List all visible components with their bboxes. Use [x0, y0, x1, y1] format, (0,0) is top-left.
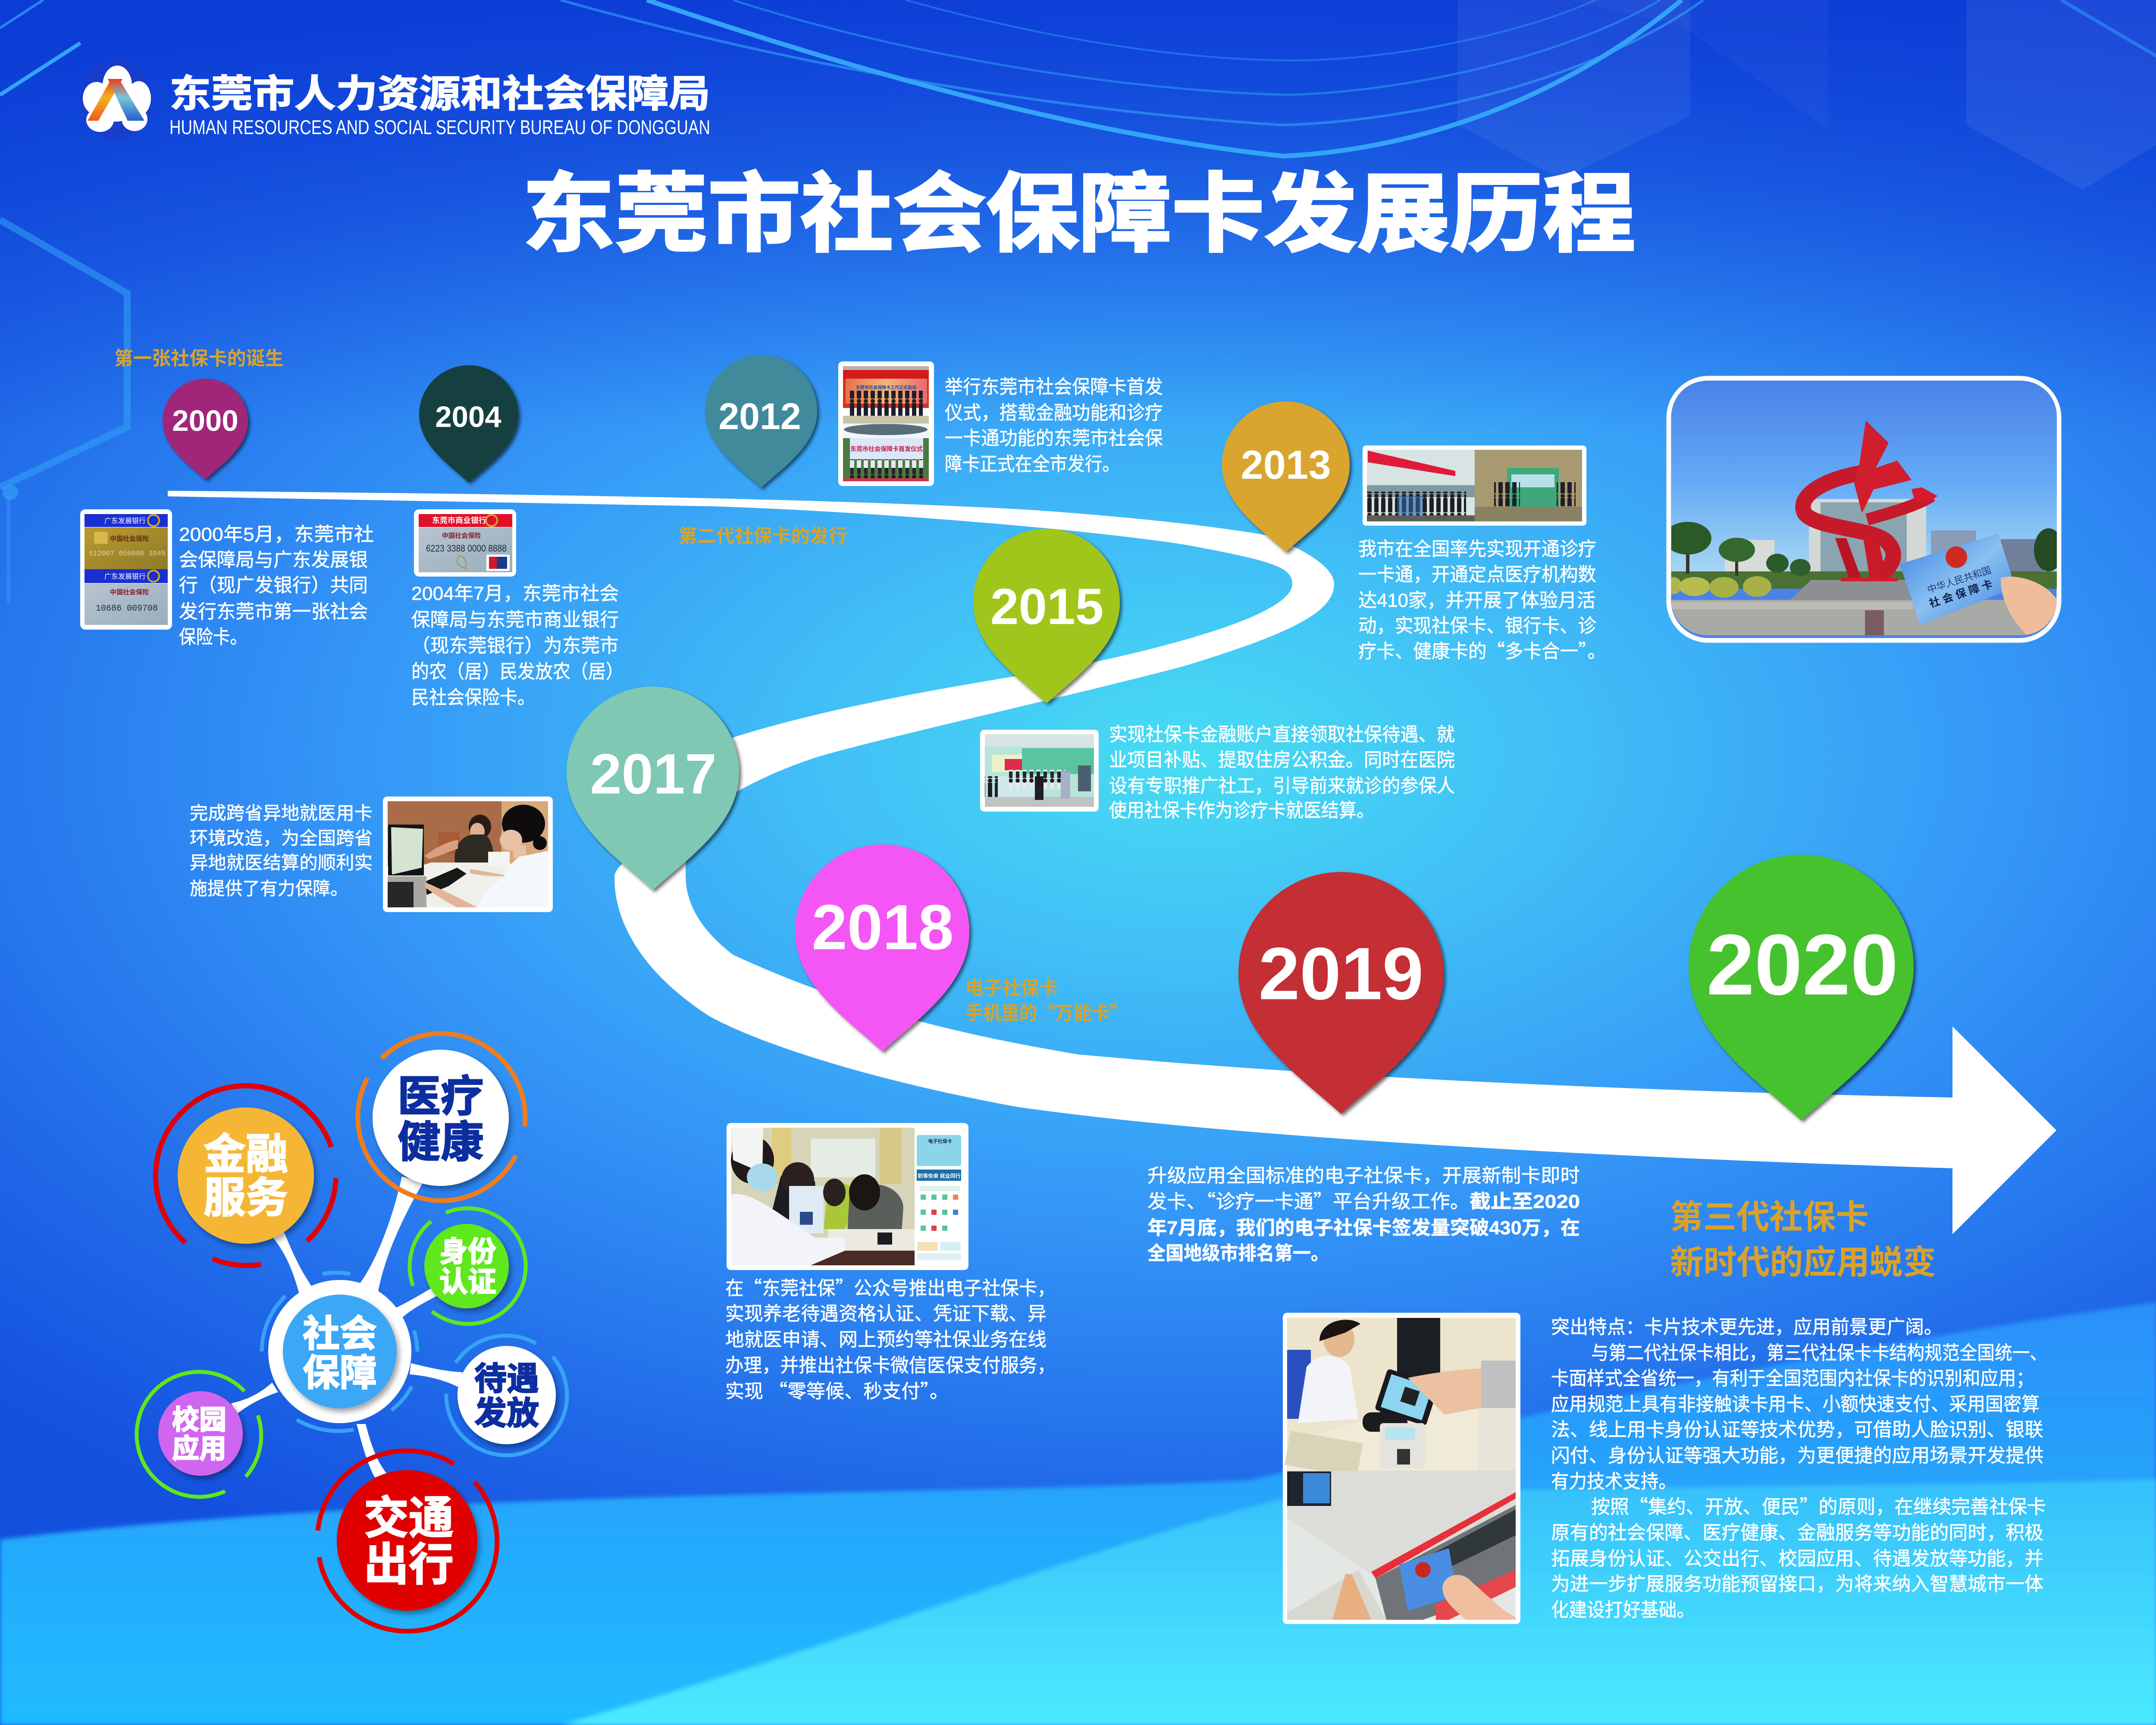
photo: 2012 launch ceremony: 东莞市社会保障卡首发仪式 — [850, 445, 923, 452]
text: third-generation description: 为进一步扩展服务功能预留接口，为将来纳入智慧城市一体 — [1551, 1574, 2043, 1595]
text: 2004 milestone: 保障局与东莞市商业银行 — [411, 609, 619, 630]
pin 2012 — [705, 355, 817, 488]
photo: 2012 launch ceremony: 东莞市社会保障卡工作正式启动 — [856, 385, 916, 390]
text: third-generation description: 闪付、身份认证等强大功能，为更便捷的应用场景开发提供 — [1551, 1445, 2043, 1466]
text: 2019 milestone: 截止至2020 — [1470, 1191, 1580, 1212]
text: 2015 milestone: 设有专职推广社工，引导前来就诊的参保人 — [1109, 775, 1455, 797]
text: 2000 milestone: 发行东莞市第一张社会 — [179, 601, 368, 622]
text: 2012 milestone: 举行东莞市社会保障卡首发 — [945, 376, 1163, 398]
text: 2013 milestone — [1358, 539, 1606, 663]
heading: second generation: 第二代社保卡的发行 — [678, 526, 847, 547]
pin 2017: 2017 — [590, 742, 717, 806]
node: financial services: 金融 — [204, 1130, 288, 1178]
pin 2019: 2019 — [1259, 932, 1423, 1015]
text: third-generation description: 与第二代社保卡相比，第三代社保卡卡结构规范全国统一、 — [1591, 1342, 2047, 1364]
node: transport: 出行 — [364, 1540, 454, 1590]
pin 2000: 2000 — [172, 404, 238, 437]
photo: landmark sculpture with card: 社 会 保 障 卡 — [1928, 578, 1994, 610]
text: 2017 milestone: 异地就医结算的顺利实 — [190, 853, 373, 873]
node: medical health — [358, 1034, 525, 1201]
text: 2019 milestone: 发卡、“诊疗一卡通”平台升级工作。 — [1147, 1186, 1470, 1214]
text: third-generation description: 化建设打好基础。 — [1551, 1600, 1695, 1621]
timeline ribbon arrow — [168, 491, 2056, 1234]
text: 2012 milestone: 仪式，搭载金融功能和诊疗 — [945, 402, 1163, 423]
pin 2015 — [973, 529, 1120, 703]
text: third-generation description: 应用规范上具有非接触读卡用卡、小额快速支付、采用国密算 — [1551, 1394, 2040, 1415]
node: benefits payment — [446, 1336, 567, 1455]
hub: social security — [262, 1273, 417, 1431]
node: medical health: 健康 — [398, 1118, 484, 1167]
text: 2012 milestone — [945, 376, 1163, 475]
logo: bureau emblem — [80, 60, 153, 140]
text: 2018 milestone — [725, 1273, 1056, 1403]
text: 2018 milestone: 实现养老待遇资格认证、凭证下载、异 — [725, 1303, 1047, 1324]
organisation name — [169, 72, 710, 138]
node: campus — [137, 1372, 261, 1497]
text: third-generation description: 卡面样式全省统一，有利于全国范围内社保卡的识别和应用； — [1551, 1368, 2034, 1389]
pin 2020 — [1689, 855, 1914, 1120]
text: third-generation description: 拓展身份认证、公交出行、校园应用、待遇发放等功能，并 — [1551, 1548, 2043, 1569]
text: 2017 milestone: 完成跨省异地就医用卡 — [190, 803, 373, 823]
hub: social security: 社会 — [303, 1313, 377, 1355]
node: medical health: 医疗 — [398, 1073, 484, 1121]
photo: 2012 launch ceremony — [838, 361, 934, 486]
node: financial services: 服务 — [204, 1174, 288, 1221]
heading: third generation: 第三代社保卡 — [1670, 1199, 1869, 1236]
text: 2000 milestone: 会保障局与广东发展银 — [179, 549, 368, 571]
photo: first-generation cards: 512007 056006 3945 — [89, 550, 166, 558]
title: 东莞市社会保障卡发展历程 — [522, 166, 1636, 263]
photo: first-generation cards: 中国社会保险 — [110, 535, 149, 543]
node: transport: 交通 — [364, 1493, 454, 1543]
photo: landmark sculpture with card — [1664, 378, 2063, 640]
photo: 2004 card: 中国社会保险 — [442, 532, 481, 539]
pin 2012: 2012 — [718, 396, 801, 437]
text: 2018 milestone: 办理，并推出社保卡微信医保支付服务， — [725, 1355, 1056, 1376]
text: 2012 milestone: 一卡通功能的东莞市社会保 — [945, 428, 1163, 449]
text: 2013 milestone: 达410家，并开展了体验月活 — [1358, 590, 1595, 611]
text: 2017 milestone: 环境改造，为全国跨省 — [190, 828, 373, 848]
photo: 2017 clinic desk — [383, 797, 553, 912]
organisation name: HUMAN RESOURCES AND SOCIAL SECURITY BUREAU OF DONGGUAN — [169, 116, 710, 138]
pin 2019 — [1238, 872, 1444, 1114]
text: 2017 milestone: 施提供了有力保障。 — [190, 878, 348, 899]
text: third-generation description: 突出特点：卡片技术更先进，应用前景更广阔。 — [1551, 1317, 1943, 1338]
photo: 2015 service counter — [980, 730, 1099, 812]
text: 2013 milestone: 动，实现社保卡、银行卡、诊 — [1358, 615, 1596, 637]
text: 2013 milestone: 疗卡、健康卡的“多卡合一”。 — [1358, 636, 1606, 663]
node: benefits payment: 发放 — [474, 1395, 539, 1431]
pin 2000 — [163, 379, 248, 480]
text: 2015 milestone: 实现社保卡金融账户直接领取社保待遇、就 — [1109, 724, 1455, 745]
text: third-generation description — [1551, 1317, 2047, 1621]
photo: first-generation cards: 广东发展银行 — [104, 573, 146, 580]
node: financial services — [156, 1086, 336, 1266]
node: identity: 认证 — [439, 1266, 496, 1298]
text: 2004 milestone: 的农（居）民发放农（居） — [411, 661, 624, 682]
photo: first-generation cards: 中国社会保险 — [110, 588, 149, 596]
text: 2017 milestone — [190, 803, 373, 899]
text: 2000 milestone: 2000年5月，东莞市社 — [179, 524, 374, 545]
pin 2020: 2020 — [1707, 917, 1898, 1013]
pin 2017 — [567, 687, 739, 890]
photo: 2018 e-card with phone screen: 电子社保卡 — [928, 1138, 952, 1144]
node: identity — [410, 1208, 526, 1324]
photo: 2013 service hall — [1363, 445, 1586, 526]
text: 2019 milestone: 升级应用全国标准的电子社保卡，开展新制卡即时 — [1147, 1165, 1580, 1186]
node: identity: 身份 — [439, 1236, 496, 1267]
pin 2013 — [1222, 401, 1350, 552]
photo: 2018 e-card with phone screen: 职等你来 就业同行 — [918, 1173, 961, 1179]
text: 2019 milestone — [1147, 1165, 1580, 1264]
text block: electronic card heading: 手机里的“万能卡” — [965, 997, 1128, 1025]
text: 2013 milestone: 我市在全国率先实现开通诊疗 — [1358, 539, 1596, 560]
text: 2004 milestone: 民社会保险卡。 — [411, 687, 535, 708]
photo: first-generation cards: 10686 009708 — [96, 604, 158, 614]
text: 2013 milestone: 一卡通，开通定点医疗机构数 — [1358, 564, 1596, 585]
text: 2015 milestone: 使用社保卡作为诊疗卡就医结算。 — [1109, 800, 1374, 821]
pin 2018 — [795, 844, 969, 1051]
connectors — [231, 1176, 463, 1477]
photo: 2004 card: 东莞市商业银行 — [432, 516, 486, 525]
text: 2004 milestone: （现东莞银行）为东莞市 — [411, 635, 619, 656]
text: third-generation description: 有力技术支持。 — [1551, 1471, 1677, 1492]
node: benefits payment: 待遇 — [474, 1361, 539, 1397]
diagram: social security functions — [137, 1034, 567, 1631]
photo: landmark sculpture with card: 中华人民共和国 — [1926, 565, 1993, 596]
pin 2004 — [419, 365, 518, 483]
node: transport — [318, 1451, 497, 1631]
text: 2000 milestone — [179, 524, 374, 648]
text: 2015 milestone: 业项目补贴、提取住房公积金。同时在医院 — [1109, 750, 1455, 771]
text: 2019 milestone: 全国地级市排名第一。 — [1147, 1243, 1329, 1264]
heading: third generation — [1670, 1199, 1936, 1281]
text: 2012 milestone: 障卡正式在全市发行。 — [945, 454, 1120, 475]
photo: first-generation cards: 广东发展银行 — [104, 517, 146, 525]
text: third-generation description: 法、线上用卡身份认证等技术优势，可借助人脸识别、银联 — [1551, 1419, 2043, 1440]
organisation name: 东莞市人力资源和社会保障局 — [169, 72, 710, 115]
text: 2000 milestone: 行（现广发银行）共同 — [179, 575, 368, 596]
text block: electronic card heading: 电子社保卡 — [965, 978, 1058, 999]
pin 2015: 2015 — [990, 578, 1103, 635]
node: campus: 校园 — [172, 1405, 226, 1435]
text: third-generation description: 按照“集约、开放、便民”的原则，在继续完善社保卡 — [1591, 1491, 2046, 1519]
photo: 2004 card: 6223 3388 0000 8888 — [426, 543, 507, 554]
node: campus: 应用 — [172, 1434, 226, 1464]
photos: third-generation card usage — [1283, 1313, 1520, 1624]
text: third-generation description: 原有的社会保障、医疗健康、金融服务等功能的同时，积极 — [1551, 1522, 2043, 1543]
pin 2013: 2013 — [1241, 442, 1331, 487]
text: 2018 milestone: 实现 “零等候、秒支付”。 — [725, 1376, 949, 1403]
text block: electronic card heading — [965, 978, 1128, 1025]
text: 2015 milestone — [1109, 724, 1455, 821]
pin 2018: 2018 — [812, 892, 954, 963]
text: 2019 milestone: 年7月底，我们的电子社保卡签发量突破430万，在 — [1147, 1217, 1580, 1239]
text: 2000 milestone: 保险卡。 — [179, 627, 247, 648]
photo: first-generation cards — [80, 509, 172, 630]
photo: 2018 e-card with phone screen — [727, 1123, 968, 1270]
pin 2004: 2004 — [435, 400, 501, 433]
text: 2004 milestone: 2004年7月，东莞市社会 — [411, 583, 619, 604]
heading: first card: 第一张社保卡的诞生 — [114, 348, 284, 369]
hub: social security: 保障 — [303, 1352, 377, 1394]
text: 2018 milestone: 在“东莞社保”公众号推出电子社保卡， — [725, 1273, 1056, 1300]
text: 2018 milestone: 地就医申请、网上预约等社保业务在线 — [725, 1329, 1047, 1350]
text: 2004 milestone — [411, 583, 624, 708]
photo: 2004 card — [414, 509, 516, 577]
heading: third generation: 新时代的应用蜕变 — [1670, 1244, 1936, 1281]
